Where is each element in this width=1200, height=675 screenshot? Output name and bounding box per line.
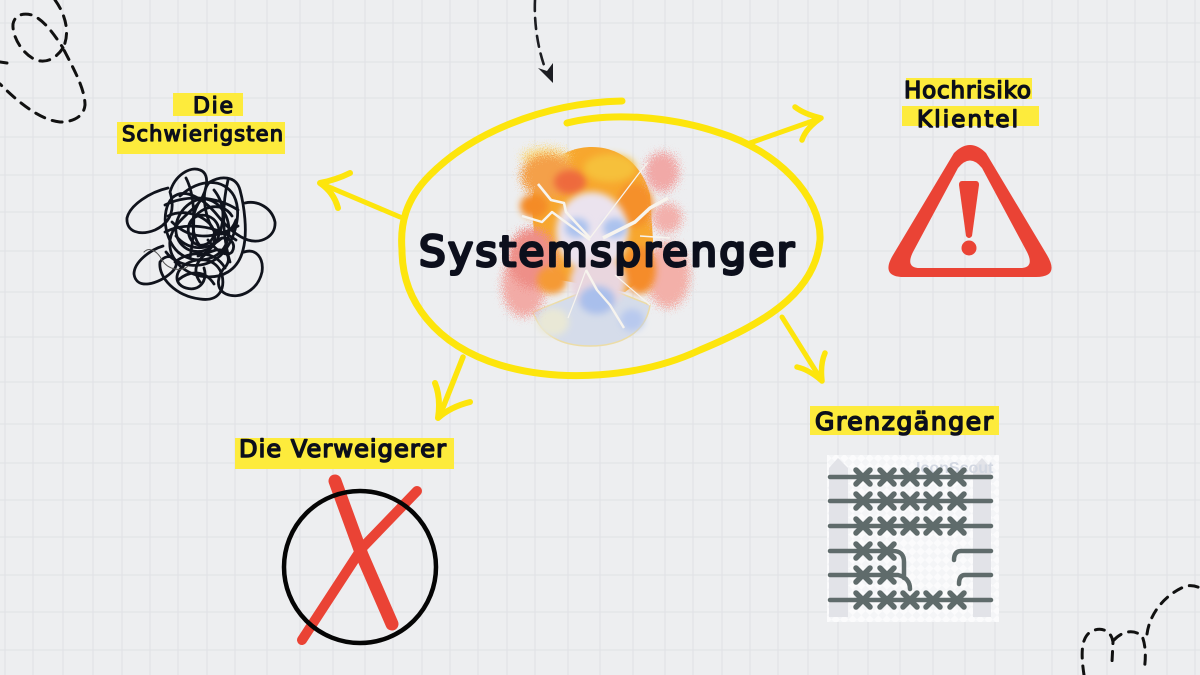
label: Grenzgänger: Grenzgänger bbox=[815, 407, 994, 436]
label: Hochrisiko Klientel: Klientel bbox=[917, 107, 1018, 133]
wires bbox=[830, 470, 991, 607]
label: Die Verweigerer: Die Verweigerer bbox=[239, 435, 446, 463]
yellow hand-drawn ellipse bbox=[402, 101, 820, 376]
arrow to Grenzgänger bbox=[782, 317, 825, 381]
icon: barbed wire fence with broken gap bbox=[827, 455, 999, 622]
main title: Systemsprenger bbox=[419, 227, 795, 276]
arrow to Die Verweigerer bbox=[435, 357, 470, 418]
decorative dashed loop top left bbox=[0, 0, 85, 122]
fence posts bbox=[829, 458, 848, 617]
label: Hochrisiko Klientel bbox=[902, 78, 1039, 133]
arrow to Die Schwierigsten bbox=[320, 173, 400, 217]
watermark: IconScout bbox=[916, 460, 994, 477]
icon: warning triangle bbox=[888, 145, 1052, 277]
label: Die Schwierigsten bbox=[117, 93, 285, 154]
icon: black scribble tangle bbox=[127, 169, 275, 299]
label: Hochrisiko Klientel: Hochrisiko bbox=[904, 78, 1031, 104]
arrow to Hochrisiko Klientel bbox=[750, 107, 821, 143]
label: Die Schwierigsten: Die bbox=[193, 94, 233, 119]
portrait cracks bbox=[522, 162, 670, 328]
label: Die Schwierigsten: Schwierigsten bbox=[122, 122, 283, 146]
decorative dashed squiggle bottom right bbox=[1082, 586, 1200, 675]
dashed arrow top centre bbox=[535, 0, 553, 83]
central portrait illustration: shattered head bbox=[502, 147, 690, 346]
portrait colour wash bbox=[502, 147, 690, 346]
icon: crossed circle bbox=[284, 481, 436, 643]
